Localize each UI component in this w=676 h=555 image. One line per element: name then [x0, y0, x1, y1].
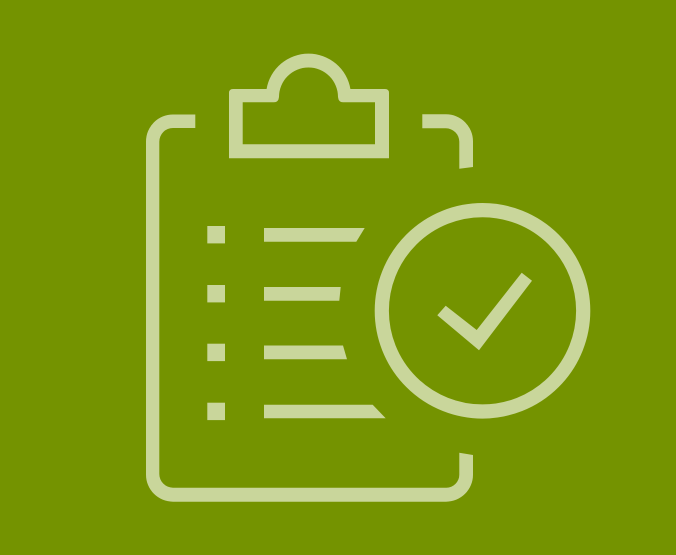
clipboard clip: [229, 54, 389, 158]
check mark: [437, 273, 532, 350]
checklist row 1: [207, 226, 365, 243]
clipboard board outline: top right corner: [422, 114, 473, 169]
icon: check mark badge: [382, 210, 583, 412]
clipboard board outline: left, bottom and right sides: [146, 114, 473, 502]
checklist row 2: [207, 285, 341, 302]
icon: clipboard artwork: [146, 54, 583, 502]
badge ring: [382, 210, 583, 412]
checklist row 3: [207, 344, 347, 361]
checklist row 4: [207, 403, 386, 420]
